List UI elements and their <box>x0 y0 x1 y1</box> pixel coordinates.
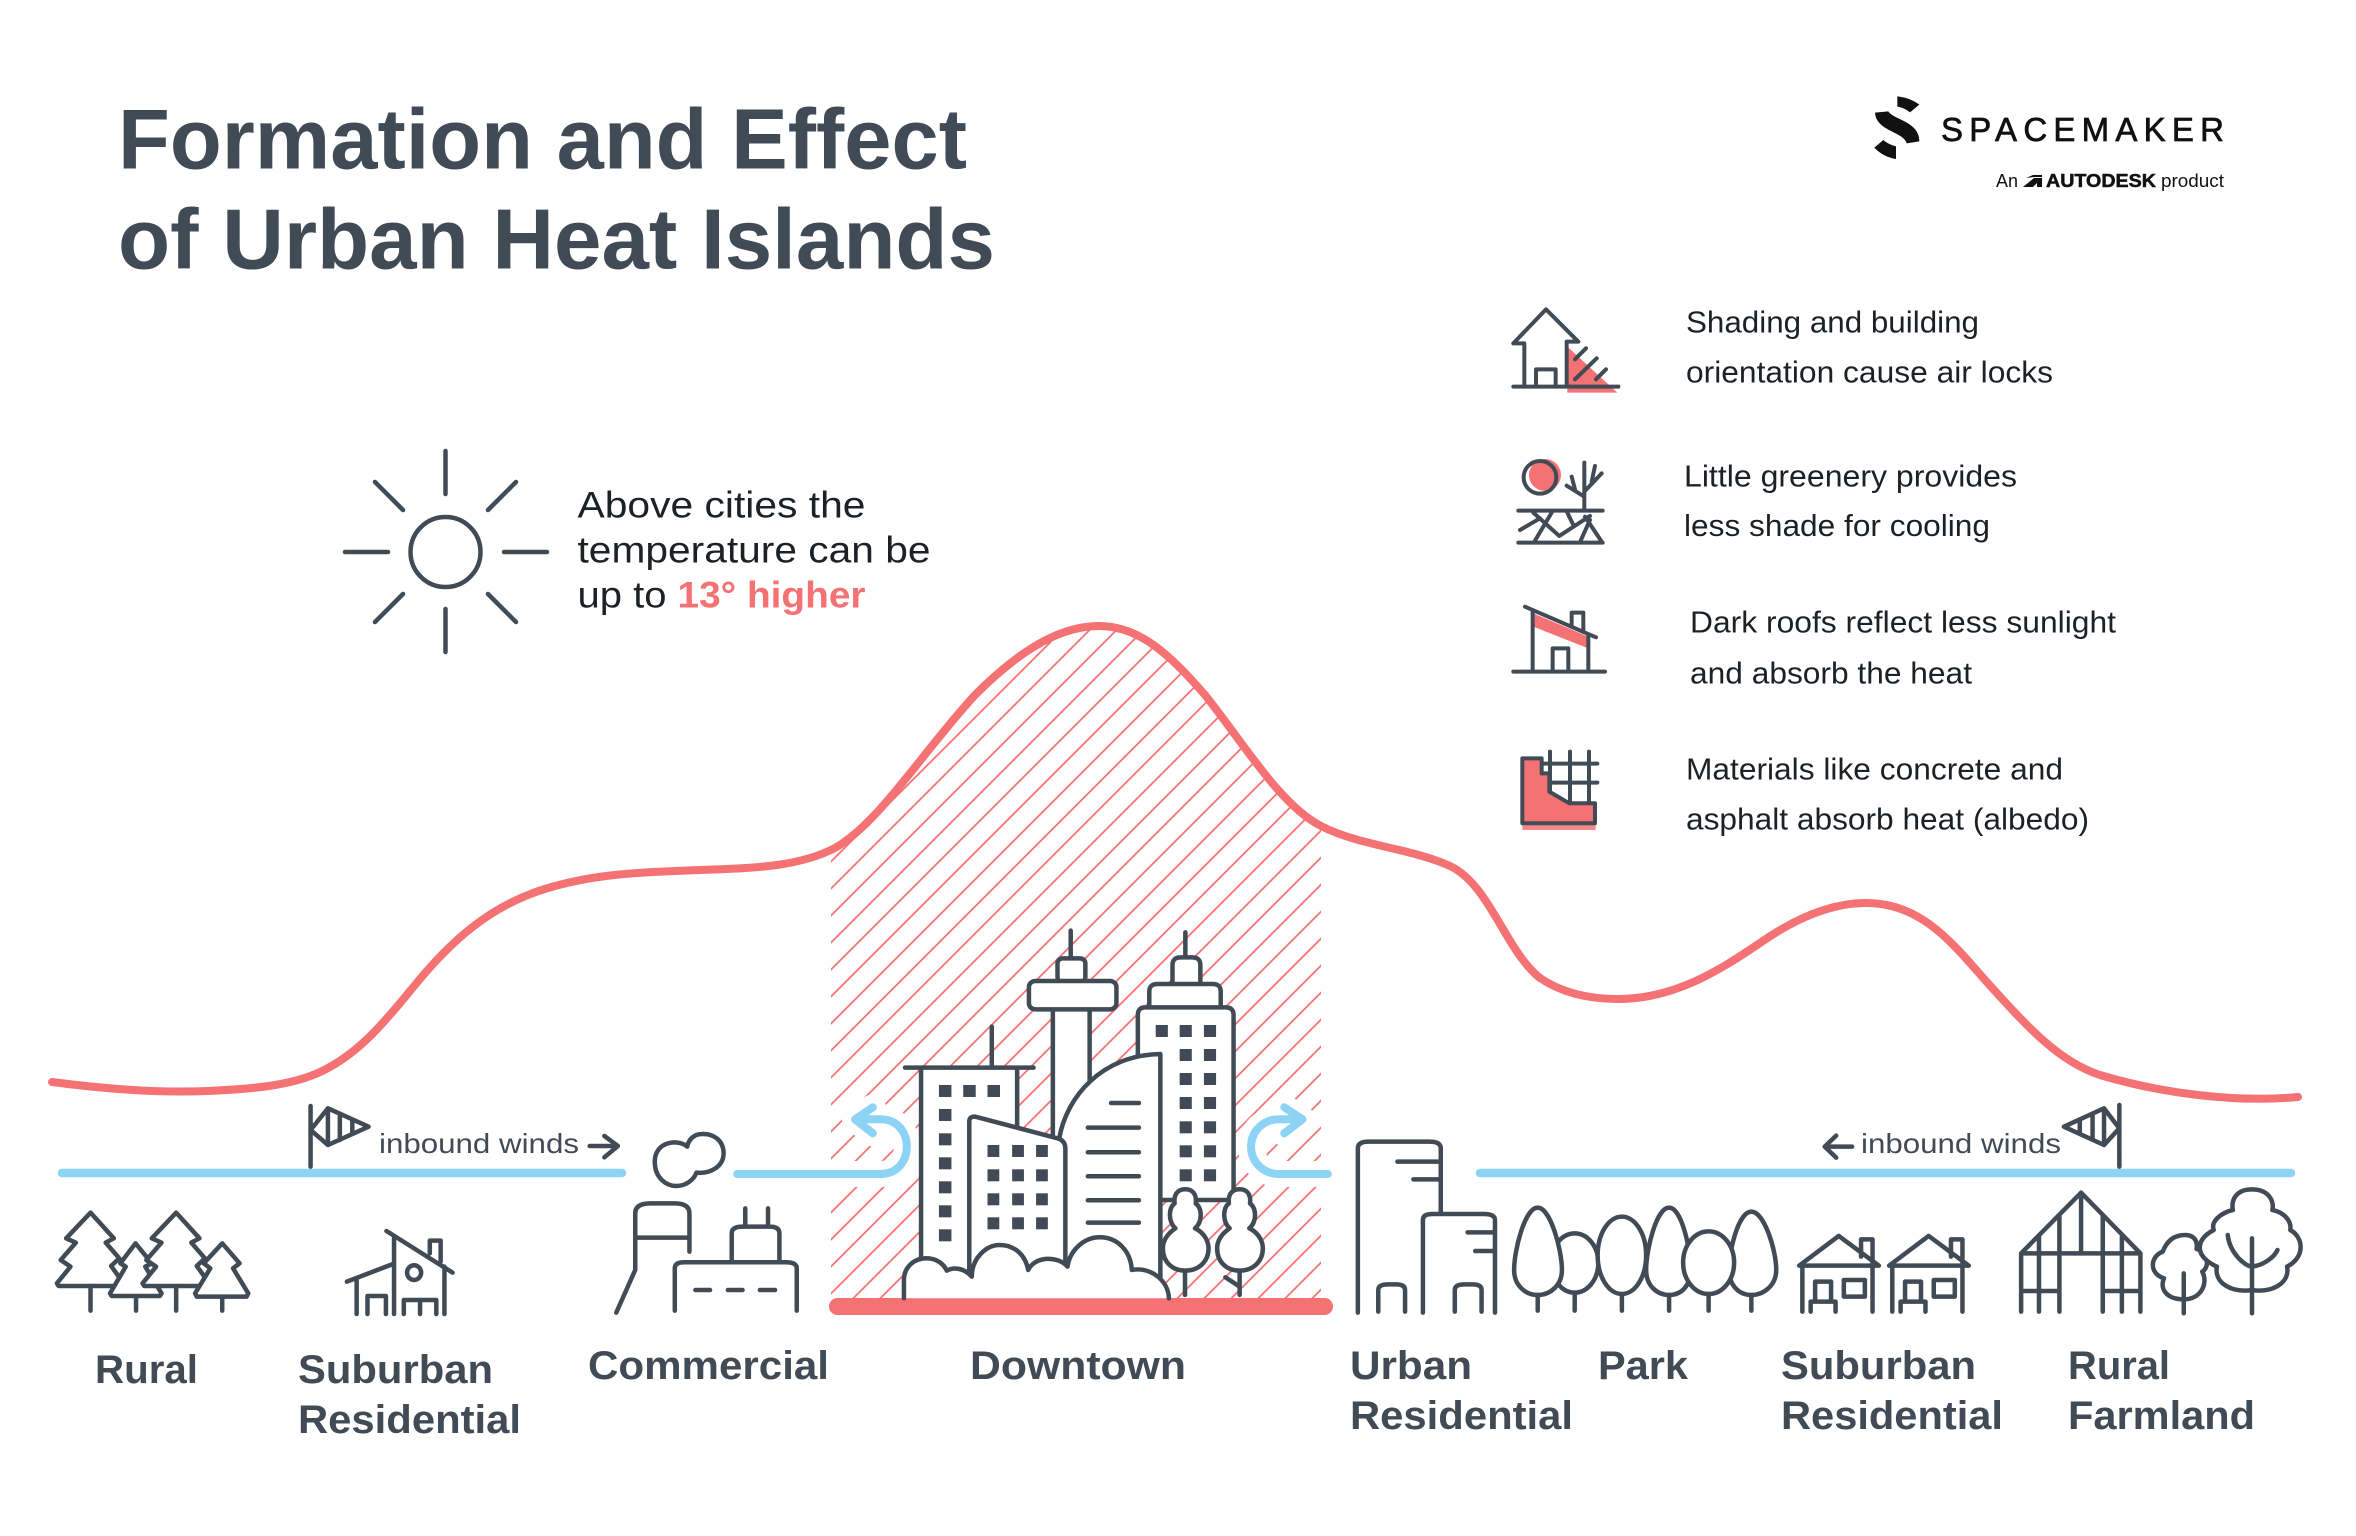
icon: little greenery <box>1518 459 1603 543</box>
icon: rural pines <box>57 1213 248 1311</box>
logo: Spacemaker <box>1874 96 2224 191</box>
icon: concrete materials <box>1522 752 1597 830</box>
logo wordmark: SPACEMAKER <box>1941 111 2224 148</box>
icon: left wind sock <box>311 1106 369 1167</box>
icon: sun <box>345 451 547 652</box>
label: rural farmland: Rural <box>2068 1344 2170 1388</box>
callout: temperature text <box>578 484 930 616</box>
tree one <box>1163 1189 1209 1295</box>
label: rural farmland <box>2068 1344 2255 1438</box>
icon: greenhouse <box>2021 1193 2140 1312</box>
text: shading <box>1686 304 2053 390</box>
label: rural: Rural <box>95 1348 198 1392</box>
callout: temperature text: 13° higher <box>678 574 866 616</box>
label: suburban residential right: Suburban <box>1781 1344 1976 1388</box>
text: materials <box>1686 752 2089 836</box>
label: park: Park <box>1598 1344 1689 1388</box>
text: greenery: Little greenery provides <box>1684 458 2017 494</box>
callout: temperature text: temperature can be <box>578 530 930 570</box>
icon: right wind sock <box>2064 1105 2119 1167</box>
hatched downtown heat area <box>831 626 1321 1298</box>
autodesk tagline: An <box>1996 171 2018 191</box>
callout: temperature text: up to <box>578 574 666 616</box>
right side icons <box>1358 1105 2301 1313</box>
right tower <box>1138 932 1234 1200</box>
label: suburban residential left: Suburban <box>298 1348 493 1392</box>
label: left inbound winds: inbound winds <box>379 1128 579 1159</box>
text: materials: asphalt absorb heat (albedo) <box>1686 802 2089 836</box>
temperature curve <box>52 626 2298 1099</box>
left wind turning arrow <box>737 1107 907 1174</box>
text: dark roofs: and absorb the heat <box>1690 656 1972 690</box>
bushes <box>904 1237 1169 1298</box>
label: urban residential <box>1350 1344 1573 1438</box>
icon: suburban house <box>347 1231 453 1314</box>
text: materials: Materials like concrete and <box>1686 752 2063 786</box>
icon: suburban houses <box>1799 1236 1969 1312</box>
autodesk tagline: product <box>2161 171 2224 191</box>
label: suburban residential right: Residential <box>1781 1394 2003 1438</box>
icon: farmland trees <box>2153 1189 2301 1313</box>
legend: causes of heat islands <box>1513 304 2116 836</box>
label: urban residential: Residential <box>1350 1394 1573 1438</box>
icon: park trees <box>1514 1208 1776 1311</box>
curved building <box>1059 1054 1160 1278</box>
icon: house shading <box>1513 309 1618 393</box>
label: suburban residential right <box>1781 1344 2003 1438</box>
label: suburban residential left <box>298 1348 521 1442</box>
title <box>118 92 995 288</box>
icon: urban residential <box>1358 1142 1495 1313</box>
central tower <box>1029 931 1116 1140</box>
arrow: inbound left <box>1825 1136 1852 1158</box>
text: greenery: less shade for cooling <box>1684 508 1990 543</box>
text: shading: Shading and building <box>1686 304 1979 340</box>
label: rural farmland: Farmland <box>2068 1394 2255 1438</box>
autodesk tagline <box>1996 171 2224 191</box>
autodesk tagline: AUTODESK <box>2046 171 2156 191</box>
icon: smoke cloud <box>655 1134 724 1186</box>
icon: S mark <box>1874 96 1919 159</box>
callout: temperature text: Above cities the <box>578 484 866 526</box>
text: dark roofs <box>1690 604 2116 690</box>
label: right inbound winds: inbound winds <box>1861 1128 2061 1159</box>
title: Formation and Effect <box>118 92 967 188</box>
left wind line <box>62 1169 622 1177</box>
right wind line <box>1480 1169 2291 1177</box>
icon: downtown skyline <box>904 931 1263 1298</box>
right wind turning arrow <box>1251 1107 1328 1174</box>
left building <box>905 1027 1034 1298</box>
tree two <box>1217 1189 1263 1295</box>
text: greenery <box>1684 458 2017 543</box>
icon: commercial factory <box>616 1203 797 1313</box>
label: downtown: Downtown <box>970 1344 1186 1388</box>
text: shading: orientation cause air locks <box>1686 354 2053 390</box>
label: commercial: Commercial <box>588 1344 829 1388</box>
text: dark roofs: Dark roofs reflect less sunlight <box>1690 604 2116 640</box>
icon: dark roof <box>1513 607 1605 672</box>
label: suburban residential left: Residential <box>298 1398 521 1442</box>
arrow: inbound right <box>590 1136 618 1157</box>
window <box>407 1265 421 1280</box>
title: of Urban Heat Islands <box>118 192 995 288</box>
left side icons <box>57 1106 797 1314</box>
front building <box>969 1117 1065 1277</box>
label: urban residential: Urban <box>1350 1344 1472 1388</box>
downtown ground bar <box>829 1298 1333 1315</box>
